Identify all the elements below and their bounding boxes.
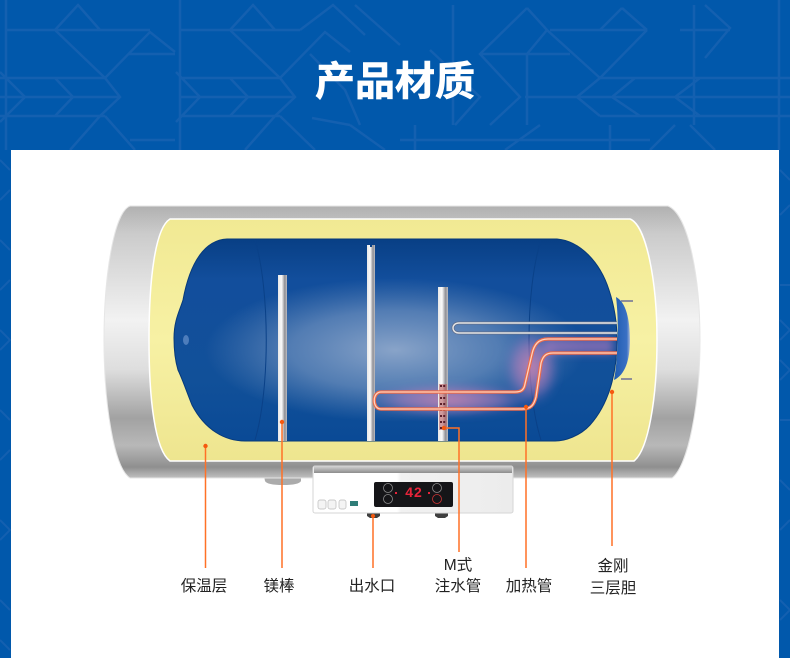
magnesium rod	[278, 275, 287, 441]
centre rod	[367, 245, 375, 441]
title: 产品材质	[315, 60, 475, 104]
label: 金刚三层胆: 金刚	[597, 557, 629, 575]
mounting foot	[264, 476, 301, 485]
label: M式注水管: 注水管	[435, 577, 481, 595]
label: 加热管: 加热管	[506, 577, 552, 595]
label: 出水口: 出水口	[349, 577, 395, 595]
label: 金刚三层胆	[590, 557, 636, 597]
label: 保温层: 保温层	[181, 577, 227, 595]
display	[374, 482, 453, 507]
silver U tube	[453, 323, 617, 333]
heating coil	[374, 339, 617, 409]
label: M式注水管	[435, 556, 481, 595]
label: M式注水管: M式	[444, 556, 472, 574]
water heater illustration	[104, 206, 700, 485]
heating glow	[365, 330, 613, 417]
outer shell	[104, 206, 700, 478]
temperature digits: 42	[405, 484, 423, 500]
insulation layer	[149, 219, 657, 461]
flange	[614, 297, 633, 380]
callout lines	[206, 392, 612, 568]
label: 金刚三层胆: 三层胆	[590, 579, 636, 597]
side strips	[0, 160, 790, 650]
callout dots	[203, 390, 614, 518]
control panel	[313, 466, 513, 518]
small buttons	[318, 500, 358, 509]
M-type inlet pipe	[438, 287, 448, 441]
label: 镁棒: 镁棒	[263, 577, 295, 595]
inner tank	[174, 239, 617, 441]
panel: white content card	[11, 150, 779, 658]
outlet fittings	[367, 512, 448, 518]
